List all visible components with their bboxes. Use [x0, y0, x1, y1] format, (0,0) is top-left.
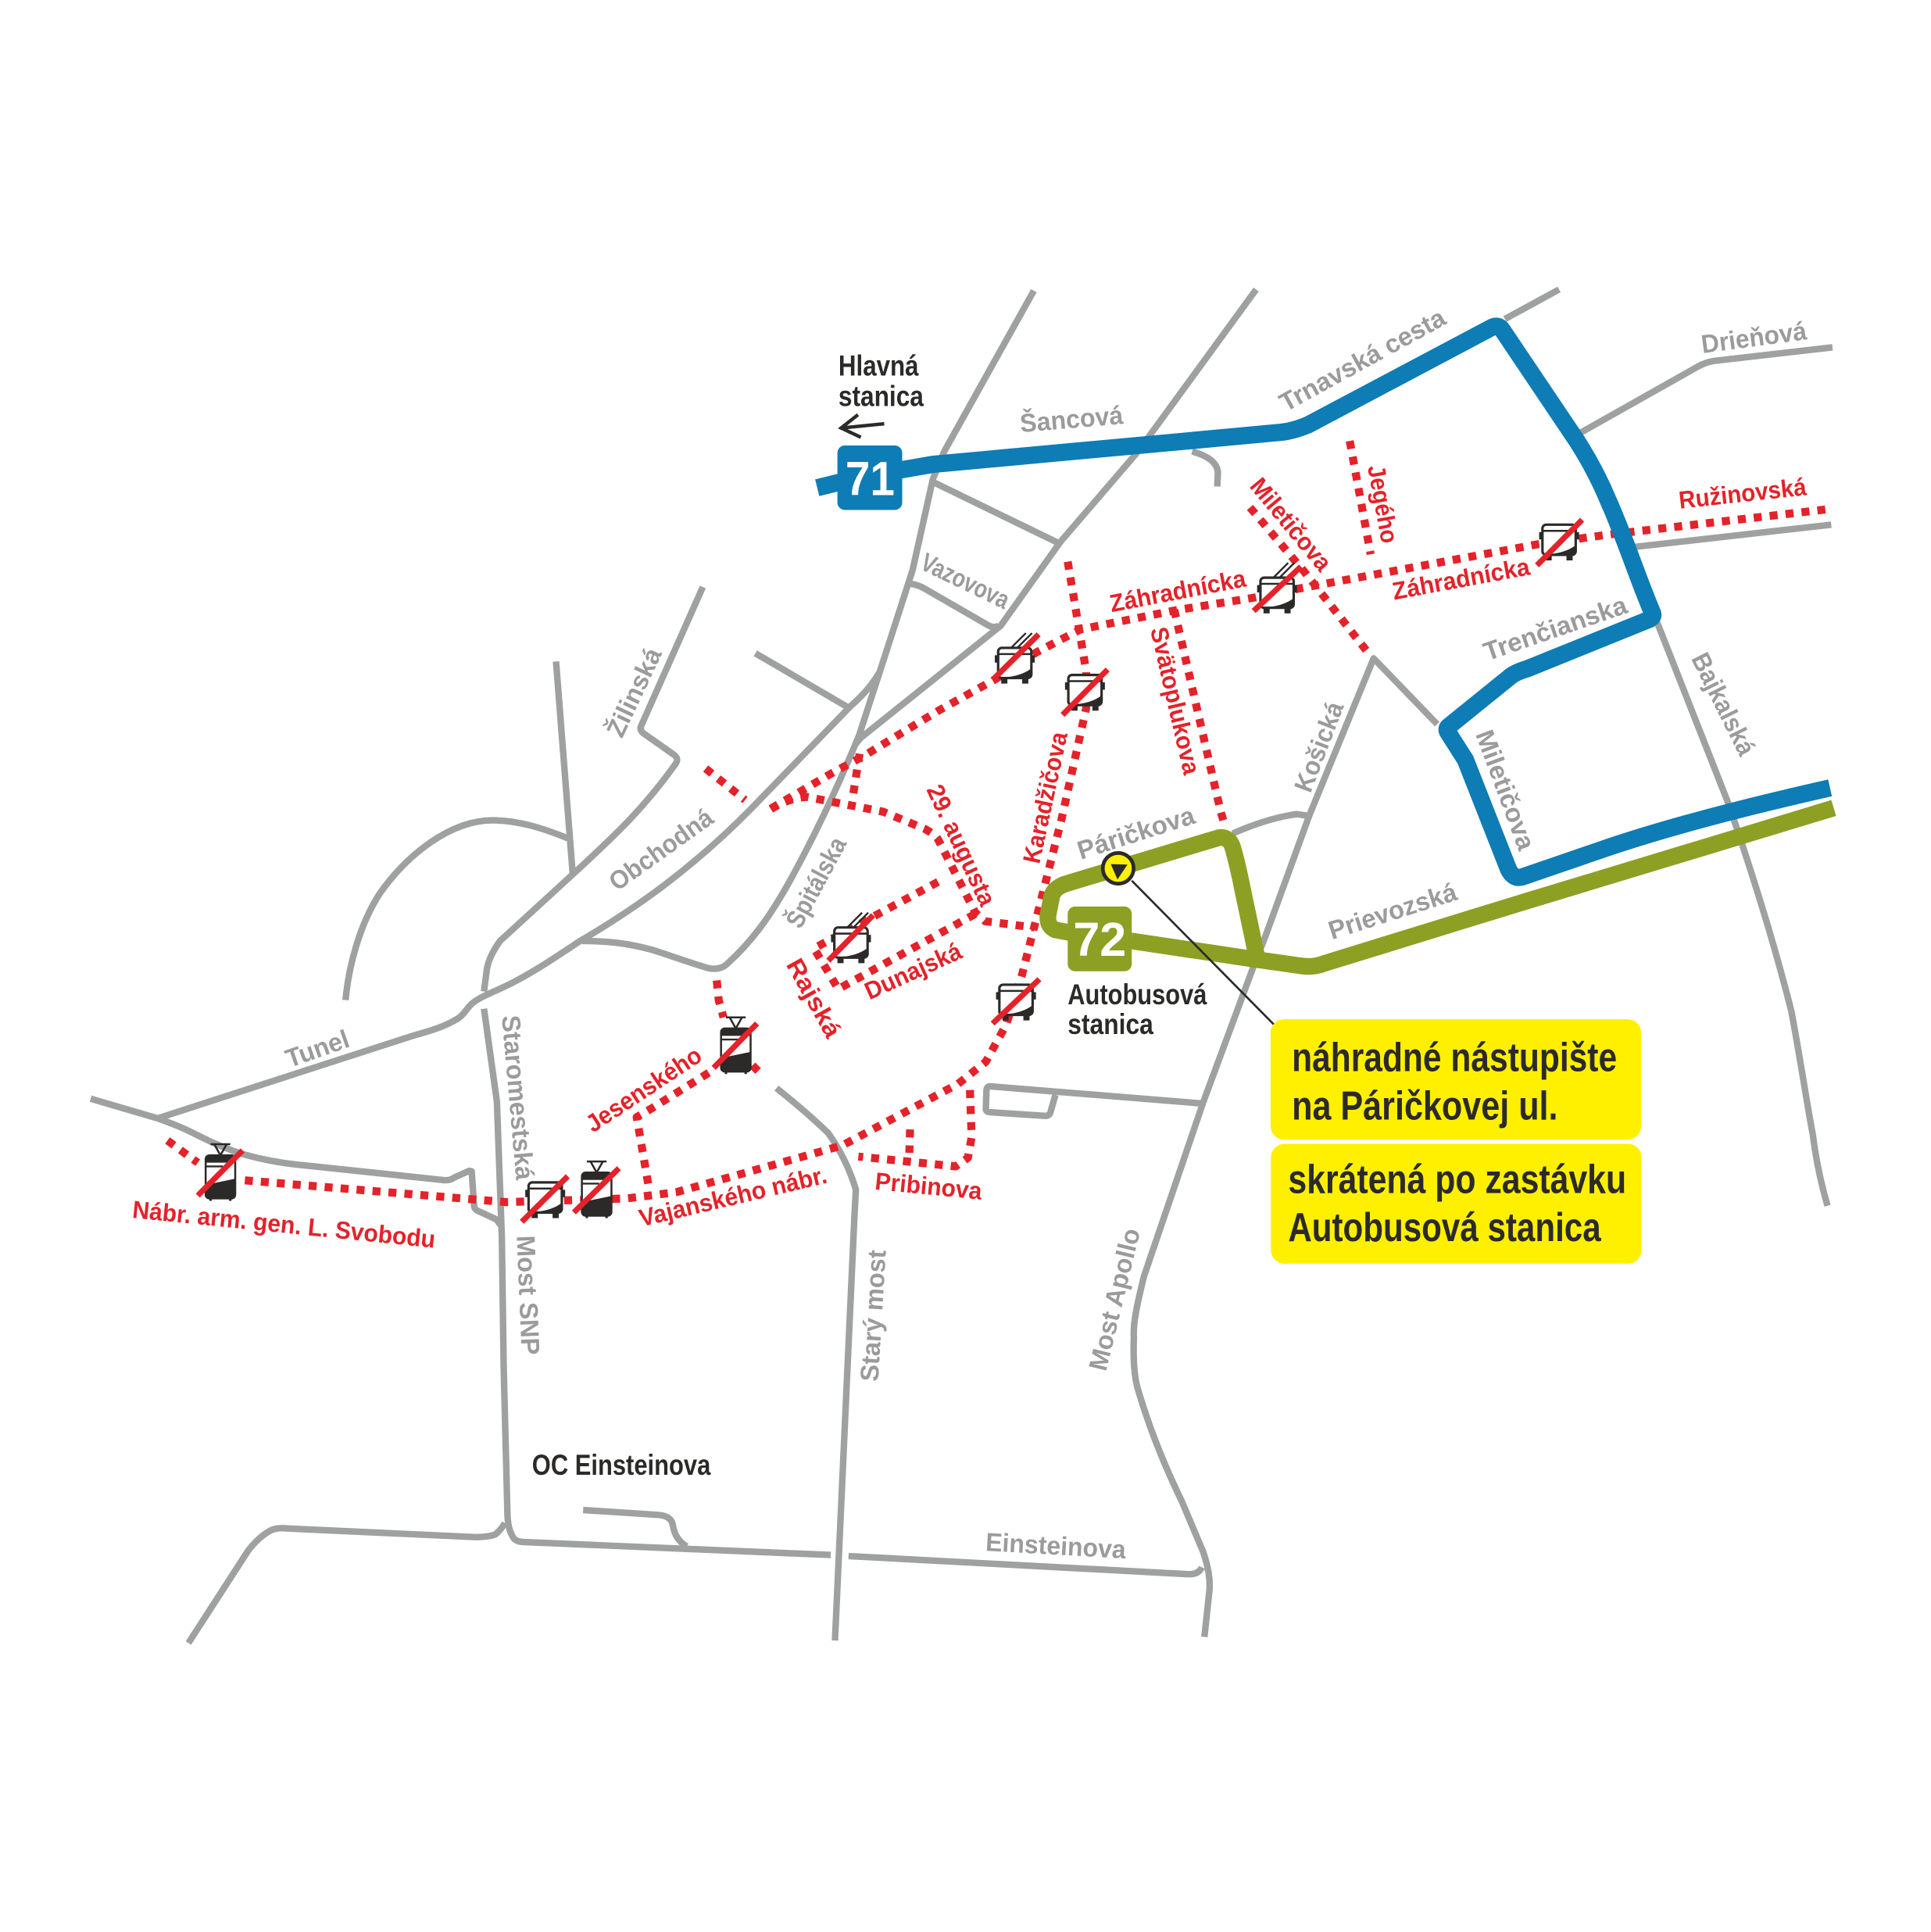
gray street labels: Vazovova — [916, 548, 1014, 615]
gray street labels: Miletičova — [1469, 726, 1540, 854]
red street labels: Vajanského nábr. — [636, 1161, 830, 1232]
label: OC Einsteinova: OC Einsteinova — [532, 1448, 711, 1481]
label: Hlavná stanica with arrow: stanica — [839, 379, 924, 412]
icon: cancelled bus Karadžičova south — [992, 979, 1039, 1024]
red street labels: Karadžičova — [1017, 729, 1073, 866]
red street labels: Jegého — [1362, 463, 1404, 546]
callout: shortened to Autobusová stanica — [1271, 1144, 1642, 1264]
label: Autobusová stanica — [1067, 978, 1207, 1040]
gray street labels: Einsteinova — [985, 1528, 1127, 1565]
label: Autobusová stanica: Autobusová — [1067, 978, 1207, 1011]
red street labels: Záhradnícka — [1107, 564, 1249, 617]
icon: cancelled tram Jesenského — [713, 1018, 757, 1074]
callout: replacement platform: náhradné nástupište — [1292, 1035, 1617, 1080]
red street labels: Záhradnícka — [1390, 552, 1532, 605]
red street labels: Ružinovská — [1677, 472, 1808, 514]
red street labels: Svätoplukova — [1145, 624, 1206, 778]
gray street labels: Páričkova — [1074, 801, 1199, 866]
gray street labels: Staromestská — [495, 1014, 539, 1182]
icon: cancelled trolleybus Dunajská — [828, 913, 873, 963]
gray street labels: Most Apollo — [1084, 1225, 1146, 1373]
gray street labels: Špitálska — [779, 832, 853, 933]
icon: cancelled bus Karadžičova — [1063, 670, 1107, 715]
blue route 71 line — [817, 326, 1830, 878]
route 71 badge — [838, 445, 902, 510]
callout: shortened to Autobusová stanica: skrátená po zastávku — [1288, 1157, 1626, 1202]
red street labels: Rajská — [781, 953, 848, 1043]
gray street labels: Košická — [1289, 697, 1350, 796]
icon: cancelled bus Most SNP — [522, 1176, 567, 1222]
callout: shortened to Autobusová stanica: Autobusová stanica — [1288, 1205, 1602, 1250]
gray street labels: Šancová — [1019, 399, 1125, 438]
icon: replacement stop marker — [1103, 853, 1134, 884]
red street labels — [131, 463, 1808, 1254]
callout leader line — [1132, 881, 1274, 1025]
red street labels: Dunajská — [860, 936, 966, 1005]
red street labels: Miletičova — [1245, 472, 1338, 577]
gray street labels: Tunel — [282, 1025, 353, 1074]
icon: cancelled trolleybus Záhradnícka — [1253, 563, 1301, 614]
gray street labels: Prievozská — [1325, 878, 1461, 946]
red street labels: Nábr. arm. gen. L. Svobodu — [131, 1195, 437, 1254]
gray street labels: Trenčianska — [1480, 591, 1631, 667]
gray street labels — [282, 303, 1809, 1565]
gray street labels: Drieňová — [1700, 317, 1809, 360]
label: Hlavná stanica with arrow: Hlavná — [839, 349, 919, 382]
gray street labels: Bajkalská — [1686, 648, 1761, 760]
callout: replacement platform: na Páričkovej ul. — [1292, 1084, 1558, 1129]
callout: replacement platform — [1271, 1019, 1641, 1140]
gray street labels: Most SNP — [510, 1235, 545, 1355]
red street labels: Jesenského — [581, 1041, 706, 1138]
gray street labels: Trnavská cesta — [1275, 303, 1451, 417]
olive route 72 line — [1048, 808, 1834, 967]
label: Autobusová stanica: stanica — [1067, 1007, 1153, 1040]
icon: cancelled tram Nábr. arm. gen. L. Svobodu — [198, 1144, 242, 1201]
gray street labels: Starý most — [856, 1249, 892, 1383]
street network — [91, 289, 1833, 1643]
route 72 badge: 72 — [1073, 913, 1126, 967]
route 71 badge: 71 — [846, 453, 895, 506]
red street labels: Pribinova — [874, 1167, 984, 1205]
red street labels: 29. augusta — [921, 780, 1002, 911]
icon: cancelled trolleybus Záhradnícka west — [992, 633, 1039, 684]
icon: cancelled bus Záhradnícka east — [1537, 520, 1582, 565]
icon: cancelled tram Vajanského nábr. — [574, 1161, 619, 1218]
gray street labels: Obchodná — [604, 803, 719, 896]
label: Hlavná stanica with arrow — [839, 349, 924, 437]
red dotted closed streets — [167, 441, 1833, 1202]
gray street labels: Žilinská — [601, 642, 668, 742]
route 72 badge — [1067, 907, 1132, 971]
